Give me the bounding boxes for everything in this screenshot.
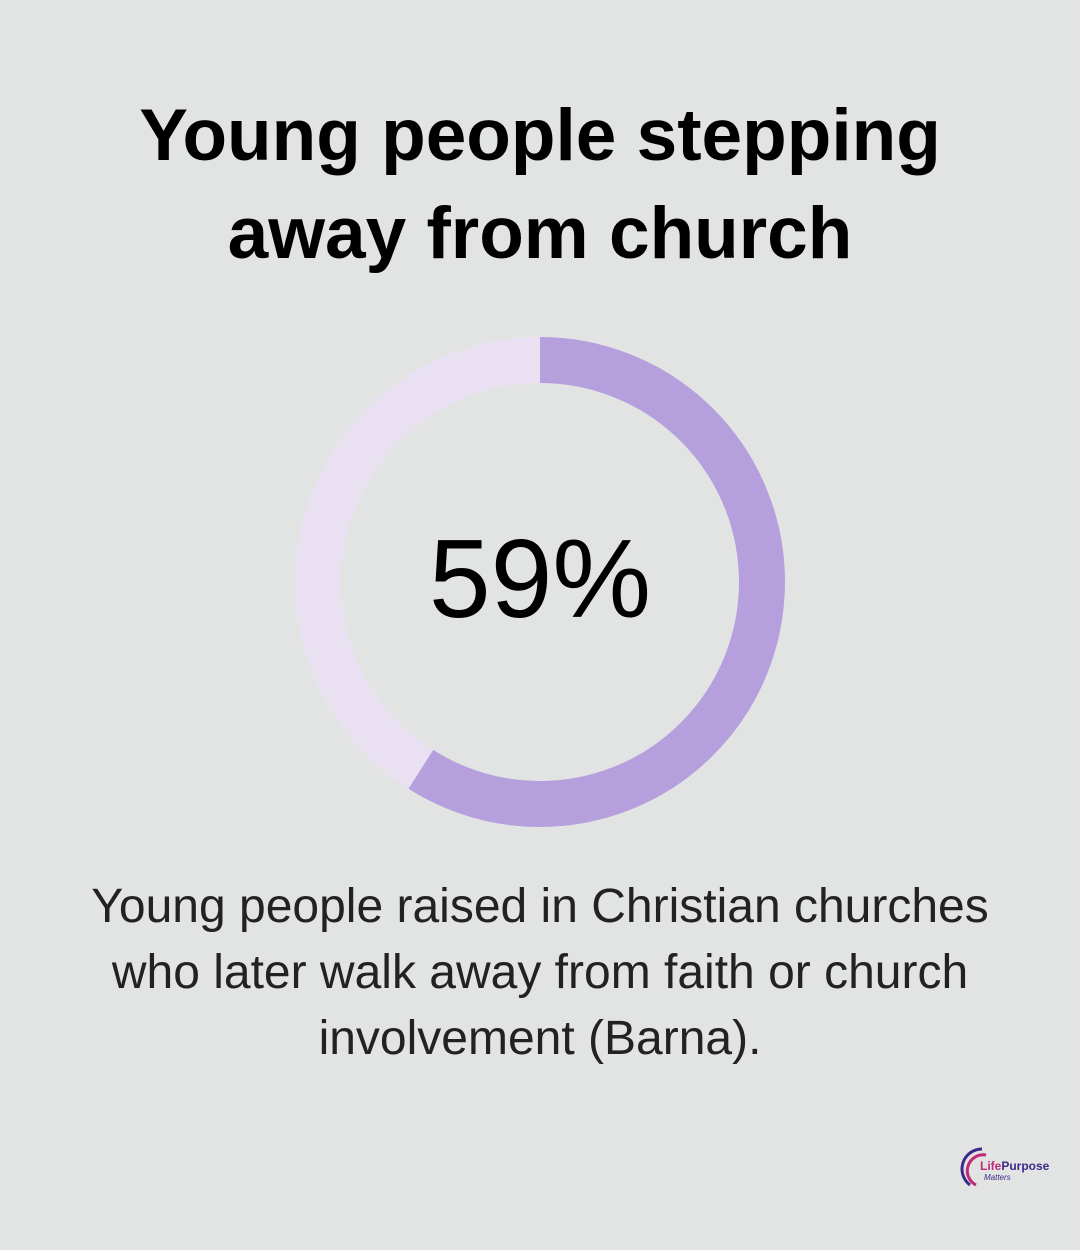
percentage label: 59% [429, 517, 651, 641]
title [139, 95, 941, 274]
logo: LifePurpose [980, 1159, 1049, 1173]
description: Young people raised in Christian churches [91, 880, 989, 933]
track ring [318, 360, 762, 804]
title: away from church [228, 193, 852, 274]
title: Young people stepping [139, 95, 941, 176]
description: involvement (Barna). [319, 1012, 761, 1065]
description [91, 880, 989, 1065]
logo: Matters [984, 1173, 1011, 1182]
description: who later walk away from faith or church [112, 946, 968, 999]
logo [960, 1148, 1049, 1186]
value arc 59% [318, 360, 762, 804]
